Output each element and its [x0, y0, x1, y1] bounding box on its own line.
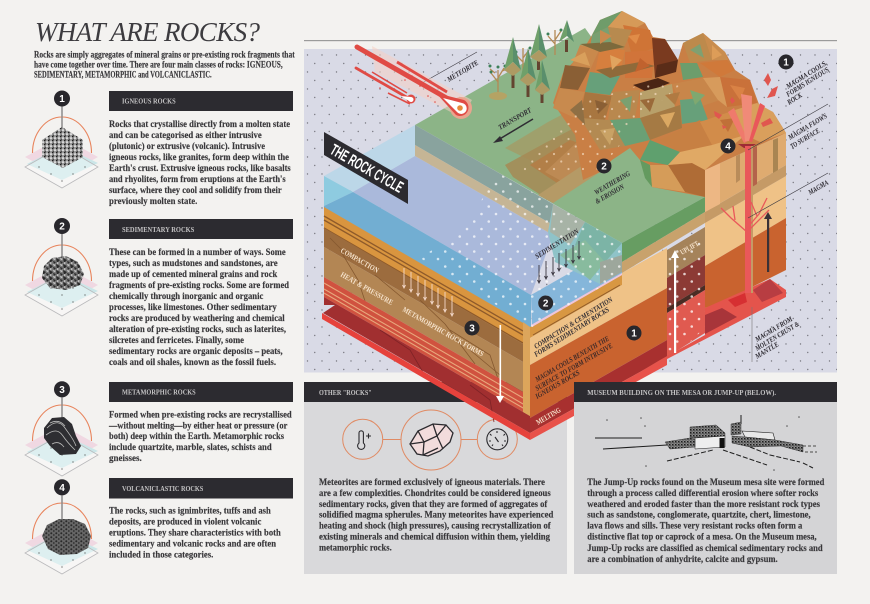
text: museum building: are a combination of anhydrite, calcite and gypsum.: [587, 555, 778, 565]
text: other rocks: solidified magma spherules. Many meteorites have experienced: [319, 510, 554, 520]
text: museum building: distinctive flat top or caprock of a mesa. On the Museum mesa,: [587, 532, 817, 542]
text: igneous rocks: Earth's crust. Extrusive igneous rocks, like basalts: [109, 164, 291, 174]
text: igneous rocks: previously molten state.: [109, 197, 197, 207]
arrow: burial: [496, 325, 504, 403]
text: sedimentary rocks: rocks are produced by weathering and chemical: [109, 314, 285, 324]
text: museum building: through a process called differential erosion where softer rocks: [587, 489, 819, 499]
text: metamorphic rocks: gneisses.: [109, 454, 142, 464]
rock icon 3: metamorphic: [25, 381, 98, 476]
rock icon 3: metamorphic: 3: [59, 385, 65, 396]
text: museum building: such as sandstone, conglomerate, quartzite, chert, limestone,: [587, 510, 811, 520]
heading: museum building: MUSEUM BUILDING ON THE MESA OR JUMP-UP (BELOW).: [587, 388, 776, 397]
chart: rock cycle block diagram: [322, 11, 831, 440]
diagram labels: FORMS IGNEOUS: [784, 65, 831, 99]
diagram labels: TRANSPORT: [496, 105, 533, 132]
text: volcaniclastic rocks: sedimentary and volcanic rocks and are often: [109, 540, 277, 550]
text: sedimentary rocks: types, such as mudstones and sandstones, are: [109, 259, 278, 269]
arrows: sedimentation: [538, 241, 580, 283]
text: sedimentary rocks: alteration of pre-existing rocks, such as laterites,: [109, 325, 287, 335]
intro text: have come together over time. There are four main classes of rocks: IGNEOUS,: [34, 60, 283, 70]
text: volcaniclastic rocks: The rocks, such as ignimbrites, tuffs and ash: [109, 506, 271, 516]
text: metamorphic rocks: [108, 410, 292, 464]
illustration: museum on the mesa: [595, 415, 817, 471]
diagram labels: SEDIMENTATION: [533, 226, 581, 261]
text: metamorphic rocks: both) deep within the Earth. Metamorphic rocks: [109, 431, 284, 442]
text: museum building: Jump-Up rocks are classified as chemical sedimentary rocks and: [587, 544, 823, 554]
green land: [415, 28, 705, 273]
panel: museum building: [574, 382, 837, 574]
text: sedimentary rocks: sedimentary rocks are organic deposits – peats,: [109, 347, 283, 357]
water surface: [324, 125, 622, 328]
intro text: SEDIMENTARY, METAMORPHIC and VOLCANICLASTIC.: [34, 70, 212, 80]
heading: sedimentary rocks: SEDIMENTARY ROCKS: [122, 225, 194, 234]
text: volcaniclastic rocks: [109, 506, 281, 560]
leader lines: [422, 52, 828, 362]
diagram labels: MAGMA: [806, 178, 830, 197]
text: sedimentary rocks: made up of cemented mineral grains and rock: [109, 270, 278, 280]
text: igneous rocks: [109, 120, 291, 207]
title: WHAT ARE ROCKS?: [35, 17, 260, 47]
text: volcaniclastic rocks: included in those categories.: [109, 550, 213, 560]
text: other rocks: are a few complexities. Chondrites could be considered igneous: [319, 489, 551, 499]
rock icon 2: sedimentary: [25, 218, 98, 316]
text: igneous rocks: surface, where they cool and solidify from their: [109, 186, 282, 196]
rock icon 4: volcaniclastic: [25, 479, 98, 574]
text: other rocks: Meteorites are formed exclusively of igneous materials. There: [319, 478, 545, 488]
numbered badges: 1: [631, 329, 637, 340]
heading: igneous rocks: IGNEOUS ROCKS: [122, 96, 176, 106]
text: other rocks: heating and shock (high pressures), causing recrystallization of: [319, 520, 551, 532]
text: other rocks: metamorphic rocks.: [319, 544, 392, 554]
diagram labels: MAGMA FLOWS: [786, 111, 829, 142]
text: other rocks: existing minerals and chemical diffusion within them, yielding: [319, 532, 550, 542]
top rule: [304, 40, 837, 41]
diagram labels: MAGMA COOLS BENEATH THE: [533, 334, 611, 384]
diagram labels: SURFACE TO FORM INTRUSIVE: [534, 341, 614, 393]
rock icon 2: sedimentary: 2: [59, 222, 65, 233]
text: museum building: [587, 478, 825, 565]
left face strata: [322, 207, 530, 440]
diagram labels: & EROSION: [594, 182, 626, 206]
diagram labels: ROCK: [785, 90, 804, 107]
panel: rock cycle background: [304, 49, 837, 372]
text: volcaniclastic rocks: eruptions. They share characteristics with both: [109, 528, 281, 538]
text: igneous rocks: and rhyolites, form from eruptions at the Earth's: [109, 175, 286, 185]
heading: metamorphic rocks: METAMORPHIC ROCKS: [122, 388, 196, 396]
text: sedimentary rocks: coals and oil shales, known as the fossil fuels.: [109, 358, 276, 368]
intro text: Rocks are simply aggregates of mineral grains or pre-existing rock fragments that: [34, 50, 295, 60]
diagram labels: IGNEOUS ROCKS: [533, 368, 581, 401]
diagram labels: MAGMA COOLS,: [784, 58, 829, 91]
text: sedimentary rocks: chemically through inorganic and organic: [109, 292, 263, 302]
numbered badges: 4: [725, 142, 731, 153]
diagram labels: [339, 58, 831, 427]
icon: thermometer, meteorite and pressure gauge: [343, 410, 517, 470]
numbered badges: 2: [601, 162, 607, 173]
heading: volcaniclastic rocks: [109, 478, 293, 498]
heading: sedimentary rocks: [109, 219, 293, 239]
diagram labels: HEAT & PRESSURE: [339, 270, 395, 307]
fan dots: [520, 85, 680, 172]
mountains: [553, 11, 786, 197]
text: sedimentary rocks: silcretes and ferricetes. Finally, some: [109, 336, 244, 346]
text: sedimentary rocks: processes, like limestones. Other sedimentary: [109, 303, 277, 313]
volcano: [714, 73, 778, 293]
rock icon 1: igneous: [25, 90, 98, 188]
text: sedimentary rocks: [109, 248, 290, 368]
diagram labels: MOLTEN CRUST &: [753, 319, 801, 353]
arrow: magma rises: [764, 212, 772, 272]
diagram labels: TO SURFACE: [788, 126, 821, 151]
heading: volcaniclastic rocks: VOLCANICLASTIC ROCKS: [122, 484, 203, 493]
diagram labels: METAMORPHIC ROCK FORMS: [401, 305, 485, 358]
diagram labels: WEATHERING: [592, 169, 632, 197]
text: museum building: The Jump-Up rocks found on the Museum mesa site were formed: [587, 478, 825, 488]
diagram labels: FORMS SEDIMENTARY ROCKS: [532, 305, 611, 359]
diagram labels: MELTING: [534, 405, 562, 427]
numbered badges: 1: [783, 58, 789, 69]
text: museum building: lava flows and sills. These very resistant rocks often form a: [587, 522, 803, 532]
numbered badges: 3: [469, 324, 475, 335]
text: metamorphic rocks: —without melting—by either heat or pressure (or: [108, 420, 288, 432]
text: igneous rocks: (plutonic) or extrusive (volcanic). Intrusive: [109, 141, 265, 152]
diagram labels: COMPACTION & CEMENTATION: [532, 295, 615, 351]
rock icon 4: volcaniclastic: 4: [59, 483, 65, 494]
diagram labels: COMPACTION: [339, 246, 381, 275]
submerged mosaic: [548, 204, 622, 284]
heading: other rocks: OTHER "ROCKS": [319, 388, 372, 397]
arrow: transport: [493, 119, 533, 143]
diagram labels: METEORITE: [445, 58, 480, 84]
white dots: [420, 171, 622, 327]
icon: trees: [488, 20, 574, 103]
text: igneous rocks: and can be categorised as either intrusive: [109, 131, 262, 141]
rock icon 1: igneous: 1: [59, 94, 65, 105]
text: volcaniclastic rocks: deposits, are produced in violent volcanic: [109, 518, 261, 528]
arrows: compaction: [402, 268, 454, 316]
label: the rock cycle: THE ROCK CYCLE: [327, 142, 406, 197]
numbered badges: 2: [543, 299, 549, 310]
text: sedimentary rocks: fragments of pre-existing rocks. Some are formed: [109, 281, 290, 291]
right block under mountains: [623, 133, 786, 382]
text: metamorphic rocks: Formed when pre-existing rocks are recrystallised: [109, 410, 292, 420]
uplift column: [667, 227, 705, 365]
text: other rocks: [319, 478, 554, 554]
panel: other rocks: [304, 382, 567, 574]
icon: meteorites: [356, 46, 472, 119]
numbered badges: [464, 54, 794, 340]
text: sedimentary rocks: These can be formed in a number of ways. Some: [109, 248, 286, 258]
diagram labels: MAGMA FROM: [753, 314, 794, 344]
erosion fan: [505, 100, 612, 203]
heading: metamorphic rocks: [109, 382, 293, 402]
intro text: [34, 50, 295, 80]
heading: igneous rocks: [109, 91, 293, 111]
right face strata: [530, 248, 667, 440]
label: the rock cycle: [324, 132, 408, 204]
diagram labels: MANTLE: [753, 340, 780, 361]
text: igneous rocks: Rocks that crystallise directly from a molten state: [109, 120, 290, 130]
diagram labels: UPLIFT: [678, 239, 700, 257]
arrow: uplift: [671, 250, 679, 353]
text: metamorphic rocks: include quartzite, marble, slates, schists and: [109, 443, 272, 453]
text: other rocks: sedimentary rocks, given that they are formed of aggregates of: [319, 500, 548, 510]
text: museum building: weathered and eroded faster than the more resistant rock types: [587, 500, 820, 510]
text: igneous rocks: igneous rocks, like granites, form deep within the: [109, 153, 289, 163]
